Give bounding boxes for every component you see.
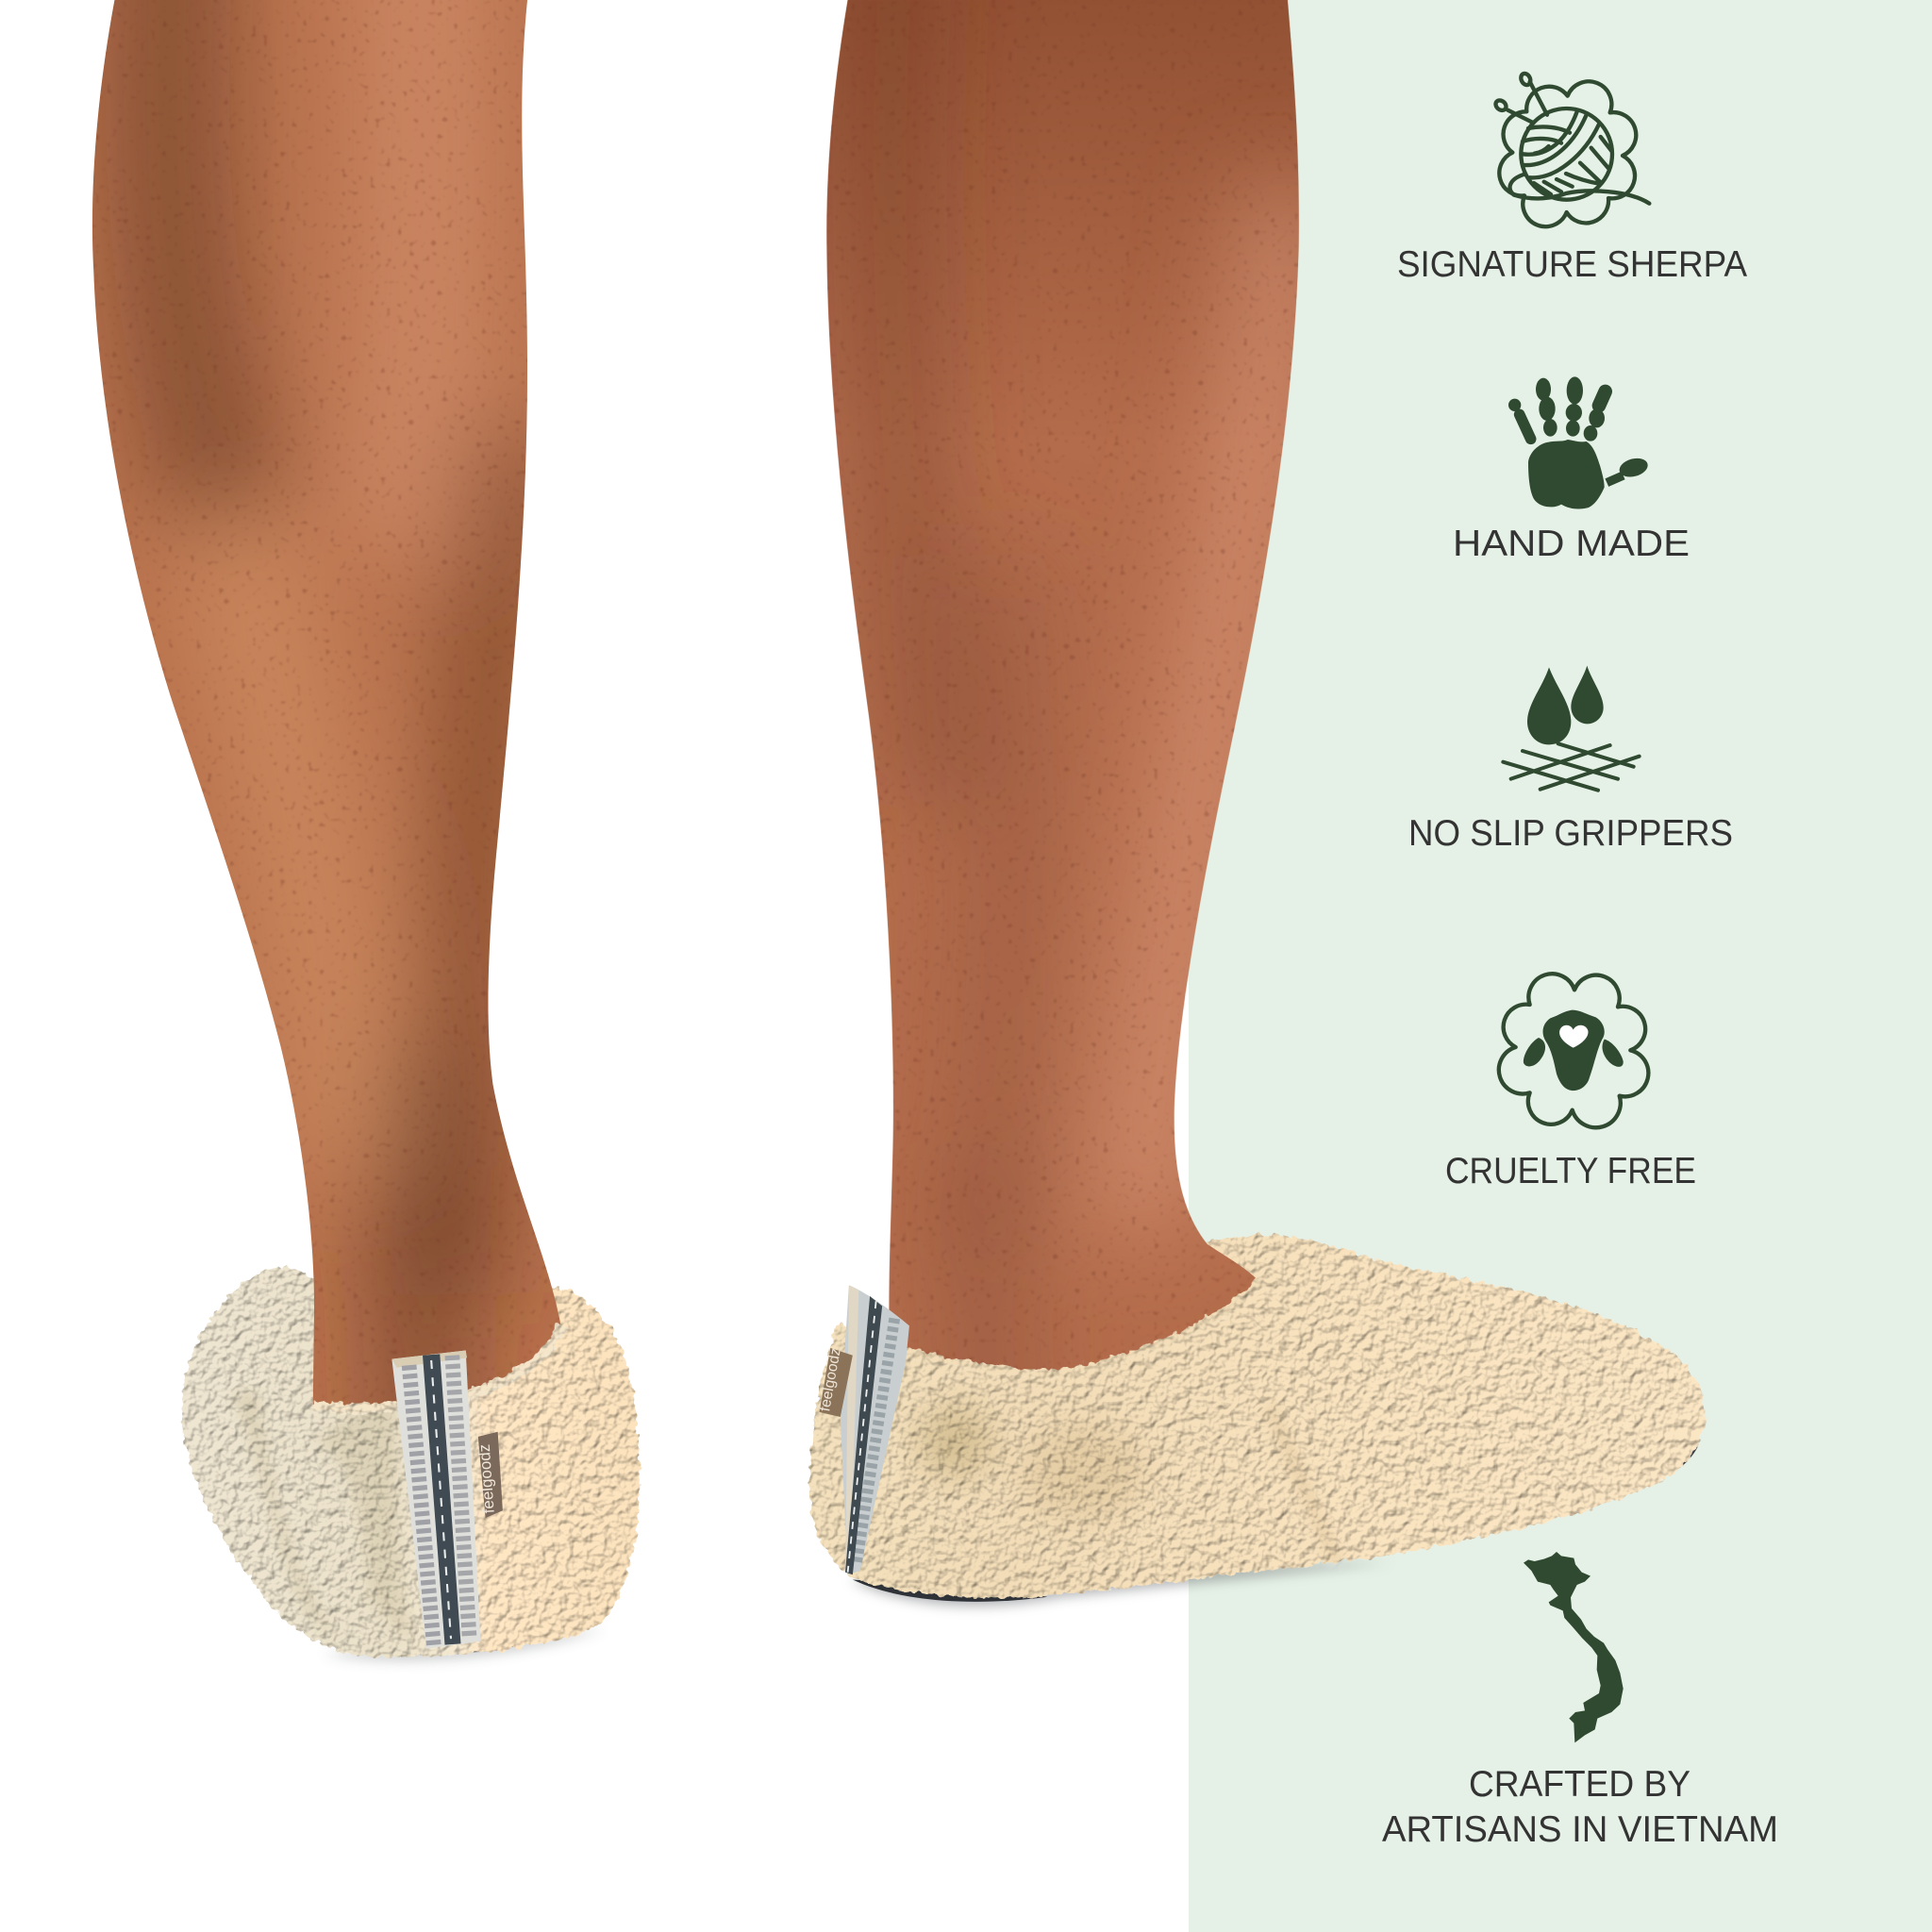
icon: map of Vietnam (1524, 1552, 1624, 1742)
right leg (826, 0, 1300, 1371)
slipper: right foot (810, 1235, 1705, 1598)
left leg (92, 0, 560, 1406)
soft shadows and soles (323, 1446, 1698, 1660)
caption: line two: ARTISANS IN VIETNAM (1382, 1809, 1778, 1850)
caption: HAND MADE (1453, 524, 1690, 564)
caption: SIGNATURE SHERPA (1397, 244, 1747, 285)
caption: line one: CRAFTED BY (1469, 1764, 1690, 1805)
feature: no slip grippers (1408, 666, 1733, 854)
photo: legs wearing sherpa slippers (92, 0, 1705, 1660)
icon: sheep in flower outline (1499, 974, 1648, 1127)
left slipper pull tab (391, 1351, 503, 1649)
brand label, left (475, 1432, 503, 1518)
caption: CRUELTY FREE (1445, 1151, 1696, 1191)
feature: crafted in vietnam (1382, 1552, 1778, 1850)
icon: drops over weave (1503, 666, 1640, 791)
slipper: left foot (182, 1267, 640, 1657)
feature: cruelty free (1445, 974, 1696, 1191)
feature: signature sherpa (1397, 72, 1747, 285)
panel: mint background (1189, 0, 1932, 1932)
caption: NO SLIP GRIPPERS (1408, 813, 1733, 854)
icon: yarn ball in flower outline (1493, 72, 1649, 226)
right slipper pull tab (817, 1285, 909, 1574)
brand label, right: feelgoodz (817, 1347, 844, 1413)
icon: hand print (1508, 376, 1650, 509)
fuzzy slipper collars over the ankles (313, 1281, 1259, 1407)
brand label, left: feelgoodz (475, 1443, 498, 1514)
feature: hand made (1453, 376, 1690, 564)
